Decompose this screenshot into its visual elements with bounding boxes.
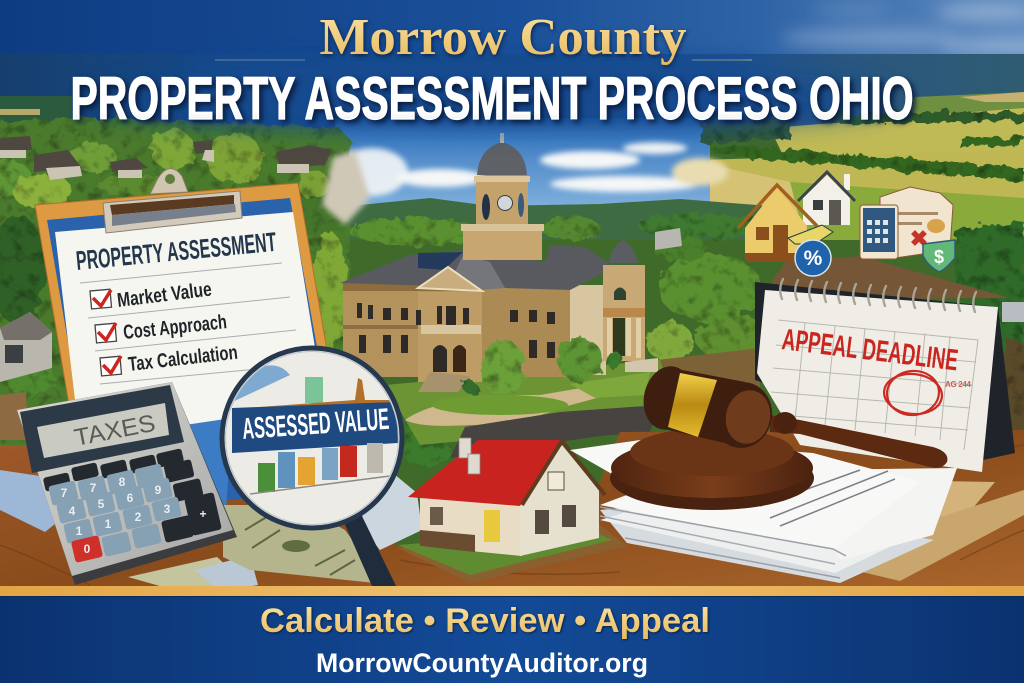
calculator display: TAXES xyxy=(72,410,158,452)
calculator keys: 8 xyxy=(119,475,126,489)
magnifying glass xyxy=(222,348,402,586)
gavel handle xyxy=(770,412,947,468)
dome xyxy=(477,142,527,175)
website: MorrowCountyAuditor.org xyxy=(316,648,648,678)
clipboard xyxy=(35,168,335,510)
back tree belt xyxy=(349,218,481,246)
miniature house xyxy=(398,438,627,583)
gavel head xyxy=(638,362,778,454)
calculator keys: 6 xyxy=(127,491,134,505)
icon: document: ✖ xyxy=(910,226,928,251)
lens contents: ASSESSED VALUE xyxy=(241,403,390,446)
sound block xyxy=(610,446,814,510)
sky clouds top right xyxy=(780,4,1024,52)
title background fade xyxy=(90,56,890,126)
village houses xyxy=(0,136,1024,440)
icon: white house xyxy=(798,172,855,225)
courthouse xyxy=(340,133,680,458)
calculator keys: 7 xyxy=(90,481,97,495)
mid right trees xyxy=(658,254,762,322)
icon: percent badge xyxy=(788,225,833,276)
bar chart xyxy=(250,443,390,494)
icon: percent badge: % xyxy=(804,247,823,270)
checklist items: Tax Calculation xyxy=(127,342,239,376)
calculator keys: 1 xyxy=(76,524,83,538)
centre sky xyxy=(335,118,710,208)
wooden table xyxy=(0,430,1024,590)
hills xyxy=(350,198,770,240)
icons: houses and documents xyxy=(738,172,955,276)
heading: county name: Morrow County xyxy=(320,9,686,66)
right tower wing xyxy=(603,265,645,361)
gavel xyxy=(610,362,947,510)
paper stack xyxy=(570,440,957,583)
right tree lines xyxy=(830,112,1024,124)
checklist items: Cost Approach xyxy=(122,311,228,344)
left woods xyxy=(0,118,350,470)
calculator keys: 1 xyxy=(105,517,112,531)
calculator keys: 4 xyxy=(69,504,76,518)
calculator keys: 3 xyxy=(164,502,171,516)
lawn and paths xyxy=(385,360,680,458)
clip xyxy=(103,168,242,233)
checklist lines xyxy=(80,263,300,384)
far right trees xyxy=(950,222,1024,440)
calculator keys: 0 xyxy=(84,542,91,556)
right fields xyxy=(690,92,1024,240)
windows xyxy=(357,303,555,372)
checklist items xyxy=(90,279,239,376)
calculator xyxy=(17,382,237,585)
spiral binding xyxy=(780,279,976,312)
bush beside house xyxy=(399,423,451,467)
icon: yellow house xyxy=(738,185,817,262)
calculator keys: 7 xyxy=(61,486,68,500)
pediment xyxy=(418,267,482,291)
calendar xyxy=(755,279,1015,472)
assessed value banner xyxy=(232,402,398,453)
calculator keys: 5 xyxy=(98,497,105,511)
gold divider xyxy=(0,586,1024,598)
checklist items: Market Value xyxy=(116,279,213,312)
footer band xyxy=(0,597,1024,683)
icon: calculator xyxy=(860,205,898,259)
entry stairs xyxy=(418,372,470,392)
calculator keys xyxy=(43,448,222,563)
date note: AG 244 xyxy=(945,380,972,389)
checklist heading: PROPERTY ASSESSMENT xyxy=(75,227,278,276)
tagline: Calculate • Review • Appeal xyxy=(260,602,710,640)
calculator keys: 9 xyxy=(155,483,162,497)
manila folders xyxy=(862,480,1024,581)
dirt mound xyxy=(760,256,1010,300)
icon: document xyxy=(880,187,953,258)
lens contents xyxy=(226,350,398,526)
roof xyxy=(340,245,612,290)
tower xyxy=(463,228,542,260)
calculator keys: 2 xyxy=(135,510,142,524)
calendar grid xyxy=(771,320,978,450)
handle xyxy=(343,512,396,586)
foliage xyxy=(0,112,1024,470)
balcony xyxy=(421,325,481,334)
calculator keys: + xyxy=(199,507,207,521)
far forest xyxy=(0,54,1024,134)
deadline circle xyxy=(882,368,944,418)
banknotes and blue papers xyxy=(0,460,422,596)
icon: shield: $ xyxy=(934,247,944,267)
icon: shield xyxy=(923,240,955,272)
walls xyxy=(343,283,575,377)
front trees xyxy=(462,338,621,396)
